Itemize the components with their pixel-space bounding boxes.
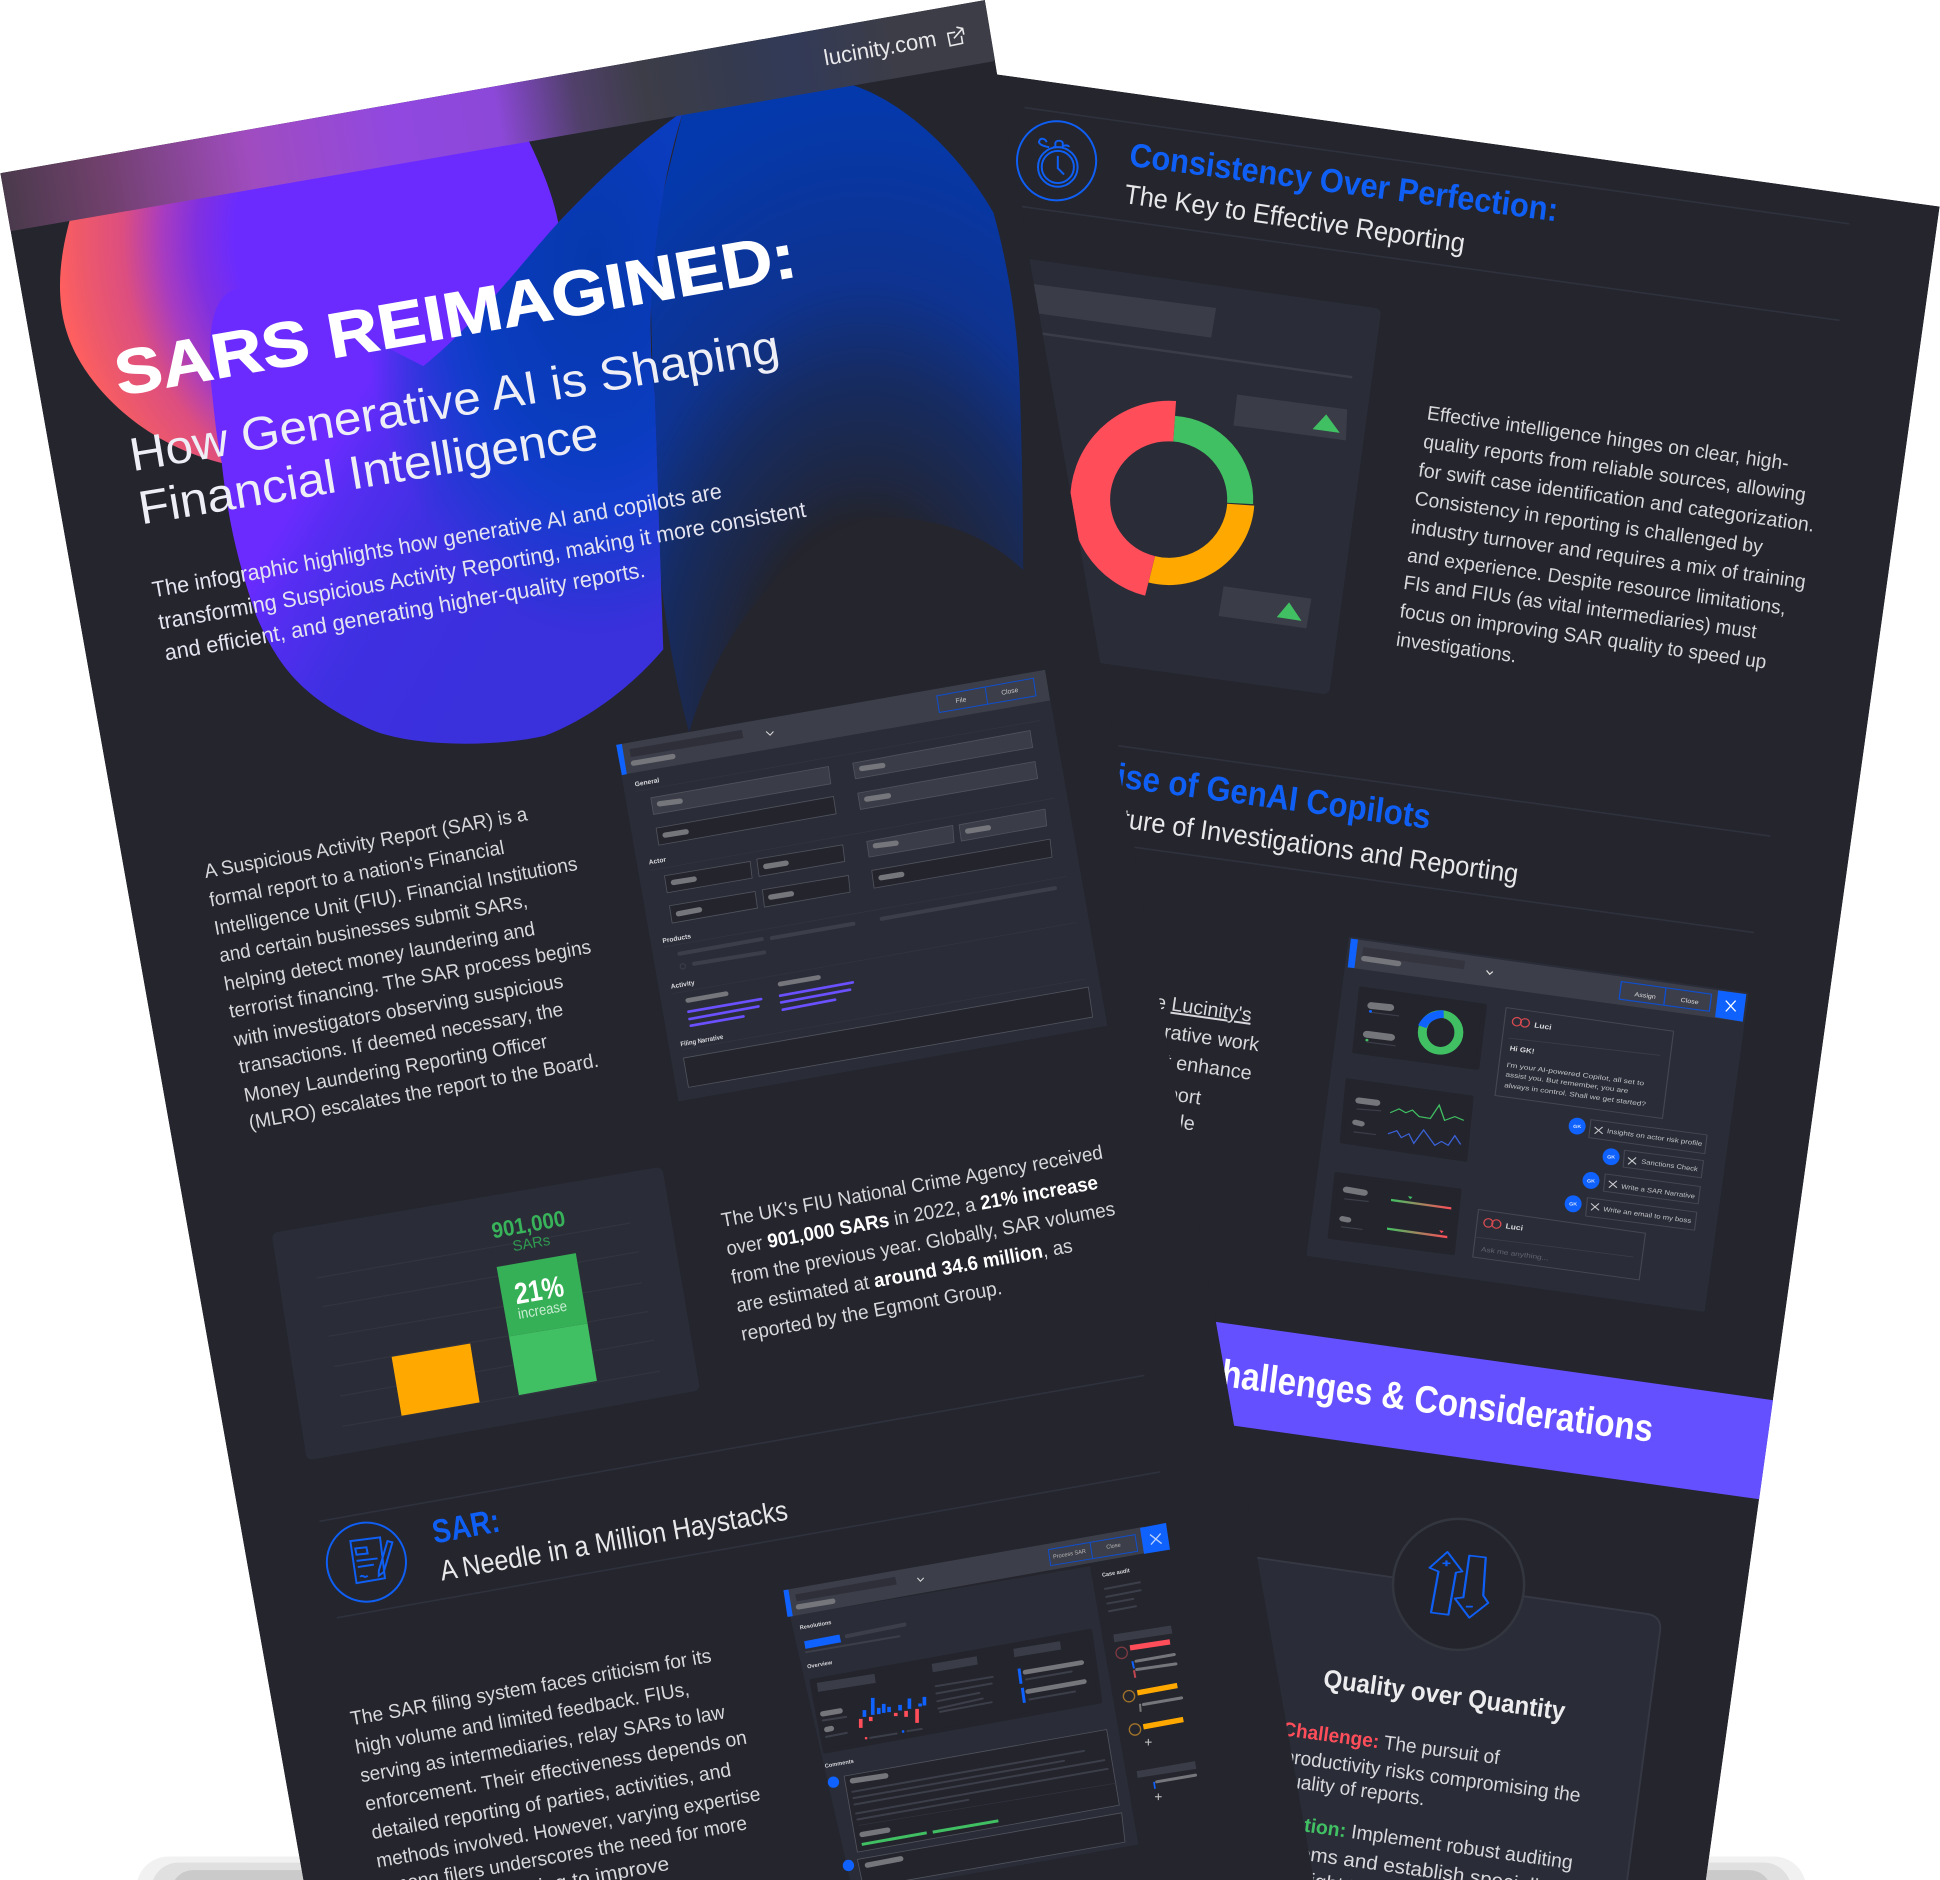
text block: what is a SAR: formal report to a nation's Financial [208,838,506,911]
chat bubble: Luci greeting: always in control. Shall we get started? [1504,1081,1647,1108]
text block: effective intelligence: Effective intelligence hinges on clear, high- [1426,403,1790,475]
panel: bar chart card [279,1174,693,1453]
chart labels [490,1206,569,1323]
chat bubble: Luci greeting: Hi GK! [1509,1044,1535,1055]
panel: SAR form screenshot [616,670,1107,1101]
subtitle [131,338,778,524]
suggestion chips: Sanctions Check [1641,1158,1699,1173]
donut chart [1070,401,1254,596]
banner: challenges & considerations [1216,1322,1773,1500]
heading: SAR: SAR: [429,1502,503,1551]
text block: what is a SAR: (MLRO) escalates the report to the Board. [247,1051,600,1134]
decorative blob: blue dome [650,82,1023,732]
mini card: donut [1354,988,1485,1068]
subheading: key to reporting: The Key to Effective Reporting [1122,178,1467,259]
suggestion chips: GK [1569,1201,1577,1207]
decorative blob: violet to blue [210,111,683,744]
card title: Quality over Quantity [1322,1665,1567,1726]
suggestion chips: Write a SAR Narrative [1621,1183,1696,1200]
form labels: Actor [648,856,667,866]
chart labels: SARs [511,1231,551,1255]
card text: challenge and solution: Challenge: The pursuit of [1281,1719,1501,1769]
subtitle: Financial Intelligence [135,408,602,535]
text block: effective intelligence: Consistency in reporting is challenged by [1413,489,1764,558]
chat input: Luci [1505,1222,1524,1233]
chart labels: 901,000 [490,1206,567,1243]
subtitle: How Generative AI is Shaping [126,321,783,482]
chat bubble: Luci greeting: I'm your AI-powered Copilot, all set to [1506,1061,1645,1087]
text block: copilots (partly hidden): that enhance [1137,1048,1253,1085]
suggestion chips: Insights on actor risk profile [1606,1127,1703,1147]
text block: UK SAR volumes: are estimated at around 34.6 million, as [735,1236,1074,1317]
stat box with up arrow [1219,586,1311,628]
text block: effective intelligence: quality reports from reliable sources, allowing [1422,432,1807,506]
text block: what is a SAR: with investigators observing suspicious [231,971,565,1051]
text block: what is a SAR: and certain businesses submit SARs, [218,891,529,967]
text block: what is a SAR: Intelligence Unit (FIU). Financial Institutions [213,854,579,940]
text block: UK SAR volumes: from the previous year. Globally, SAR volumes [730,1199,1117,1289]
text block: UK SAR volumes [720,1143,1117,1346]
panel: quality over quantity card [1257,1518,1661,1880]
form fields [651,730,1093,1087]
icon: external link [948,27,964,46]
bar: 2022 [497,1253,597,1395]
decorative blob: coral to violet [60,130,559,464]
panel: copilot screenshot: Assign [1634,991,1656,1000]
panel: SAR review screenshot: Process SAR [1052,1548,1086,1560]
text block: what is a SAR: A Suspicious Activity Report (SAR) is a [203,804,529,883]
form labels [634,777,724,1048]
form labels: General [634,777,660,788]
text block: SAR filing system: high volume and limited feedback. FIUs, [354,1679,691,1759]
panel: SAR form screenshot: Close [1001,686,1019,696]
form labels: Products [662,932,692,945]
text block: SAR filing system: enforcement. Their effectiveness depends on [364,1728,749,1816]
text block: SAR filing system: The SAR filing system faces criticism for its [349,1646,713,1730]
text block: SAR filing system [349,1646,762,1880]
panel: donut chart card [990,260,1374,688]
text block: what is a SAR [203,804,600,1134]
icon circle: up and down arrows [1393,1519,1524,1650]
text block: what is a SAR: terrorist financing. The SAR process begins [228,937,593,1023]
chart labels: increase [517,1297,569,1323]
bar chart [861,1697,924,1728]
subheading: future of investigations: The Future of Investigations and Reporting [1041,792,1520,889]
text block: UK SAR volumes: reported by the Egmont Group. [740,1278,1004,1346]
text block: effective intelligence: FIs and FIUs (as vital intermediaries) must [1402,573,1759,643]
heading: consistency over perfection: Consistency Over Perfection: [1127,136,1560,229]
text block: SAR filing system: methods involved. However, varying expertise [375,1784,762,1873]
suggestion chips: Write an email to my boss [1603,1205,1692,1224]
stat box with up arrow [1233,395,1347,440]
panel: SAR review screenshot: Case audit [1101,1567,1130,1578]
link: lucinity.com: lucinity.com [822,26,938,70]
form labels: Activity [670,979,695,990]
panel: SAR review screenshot: Resolutions [799,1619,832,1631]
text block: effective intelligence: investigations. [1395,630,1518,667]
text block: copilots (partly hidden): while [1147,1108,1196,1135]
right sheet [997,74,1940,1880]
audit sidebar [1105,1582,1196,1800]
text block: effective intelligence: industry turnover and requires a mix of training [1410,517,1807,593]
panel: SAR form screenshot: File [955,696,967,705]
text block: copilots (partly hidden) [1159,997,1260,1130]
form labels: Filing Narrative [680,1033,724,1048]
chat input [1473,1210,1645,1280]
text block: copilots (partly hidden): report [1148,1081,1203,1109]
heading: rise of GenAI copilots: The Rise of GenAI Copilots [1028,745,1433,836]
left sheet [0,0,1314,1880]
chat bubble: Luci greeting [1495,1008,1674,1118]
text block: effective intelligence: focus on improving SAR quality to speed up [1398,601,1768,674]
chat bubble: Luci greeting: Luci [1534,1021,1552,1032]
text block: what is a SAR: transactions. If deemed necessary, the [237,999,565,1078]
close button [1715,990,1746,1022]
ground shadow [136,1856,1806,1880]
subheading: needle in a haystack: A Needle in a Million Haystacks [437,1494,790,1587]
text block: UK SAR volumes: The UK's FIU National Crime Agency received [720,1143,1105,1232]
card text: challenge and solution [1286,1722,1580,1880]
text block: SAR filing system: serving as intermediaries, relay SARs to law [359,1702,727,1787]
close button [1140,1523,1170,1554]
panel: copilot screenshot: Close [1680,997,1699,1006]
title: SARS REIMAGINED: [109,220,801,409]
panel: copilot screenshot [1309,939,1746,1310]
panel: SAR review screenshot: Comments [824,1758,854,1769]
text block: SAR filing system: detailed reporting of parties, activities, and [370,1760,733,1844]
panel: SAR review screenshot [783,1523,1196,1880]
text block: what is a SAR: helping detect money laundering and [223,919,537,996]
text block: effective intelligence: and experience. Despite resource limitations, [1406,546,1787,620]
comment box [844,1730,1119,1852]
suggestion chips [1565,1118,1707,1230]
text block: what is a SAR: Money Laundering Reporting Officer [242,1032,550,1107]
text block: effective intelligence [1395,403,1816,674]
suggestion chips: GK [1607,1154,1615,1160]
card text: challenge and solution: Solution: Implement robust auditing [1261,1810,1574,1874]
top bar [0,0,997,231]
text block: copilots (partly hidden): copilots, like Lucinity's [1058,979,1253,1027]
overview card [812,1631,1100,1751]
text block: UK SAR volumes: over 901,000 SARs in 2022, a 21% increase [725,1173,1100,1260]
mini card: range sliders [1330,1174,1459,1253]
bar: previous year [392,1344,480,1416]
intro text: and efficient, and generating higher-quality reports. [163,557,647,665]
card text: challenge and solution: quality of reports. [1279,1770,1426,1810]
panel: SAR review screenshot: Close [1106,1541,1121,1550]
card text: challenge and solution: productivity risks compromising the [1282,1747,1582,1807]
intro text: The infographic highlights how generative AI and copilots are [150,479,724,602]
panel: SAR review screenshot: Overview [807,1659,833,1670]
icon: stopwatch [1017,121,1096,200]
chart labels: 21% [512,1270,566,1312]
banner: challenges & considerations: Challenges & Considerations [1195,1348,1656,1450]
suggestion chips: GK [1587,1178,1595,1184]
text block: effective intelligence: for swift case identification and categorization. [1417,460,1816,537]
icon: SAR document [327,1523,406,1602]
intro text: transforming Suspicious Activity Reporting, making it more consistent [156,497,808,634]
mini card: line chart [1342,1080,1471,1160]
chat input: Ask me anything... [1480,1246,1549,1262]
suggestion chips: GK [1573,1124,1581,1129]
text block: copilots (partly hidden): collaborative work [1101,1013,1262,1056]
chat bubble: Luci greeting: assist you. But remember, you are [1505,1071,1629,1095]
